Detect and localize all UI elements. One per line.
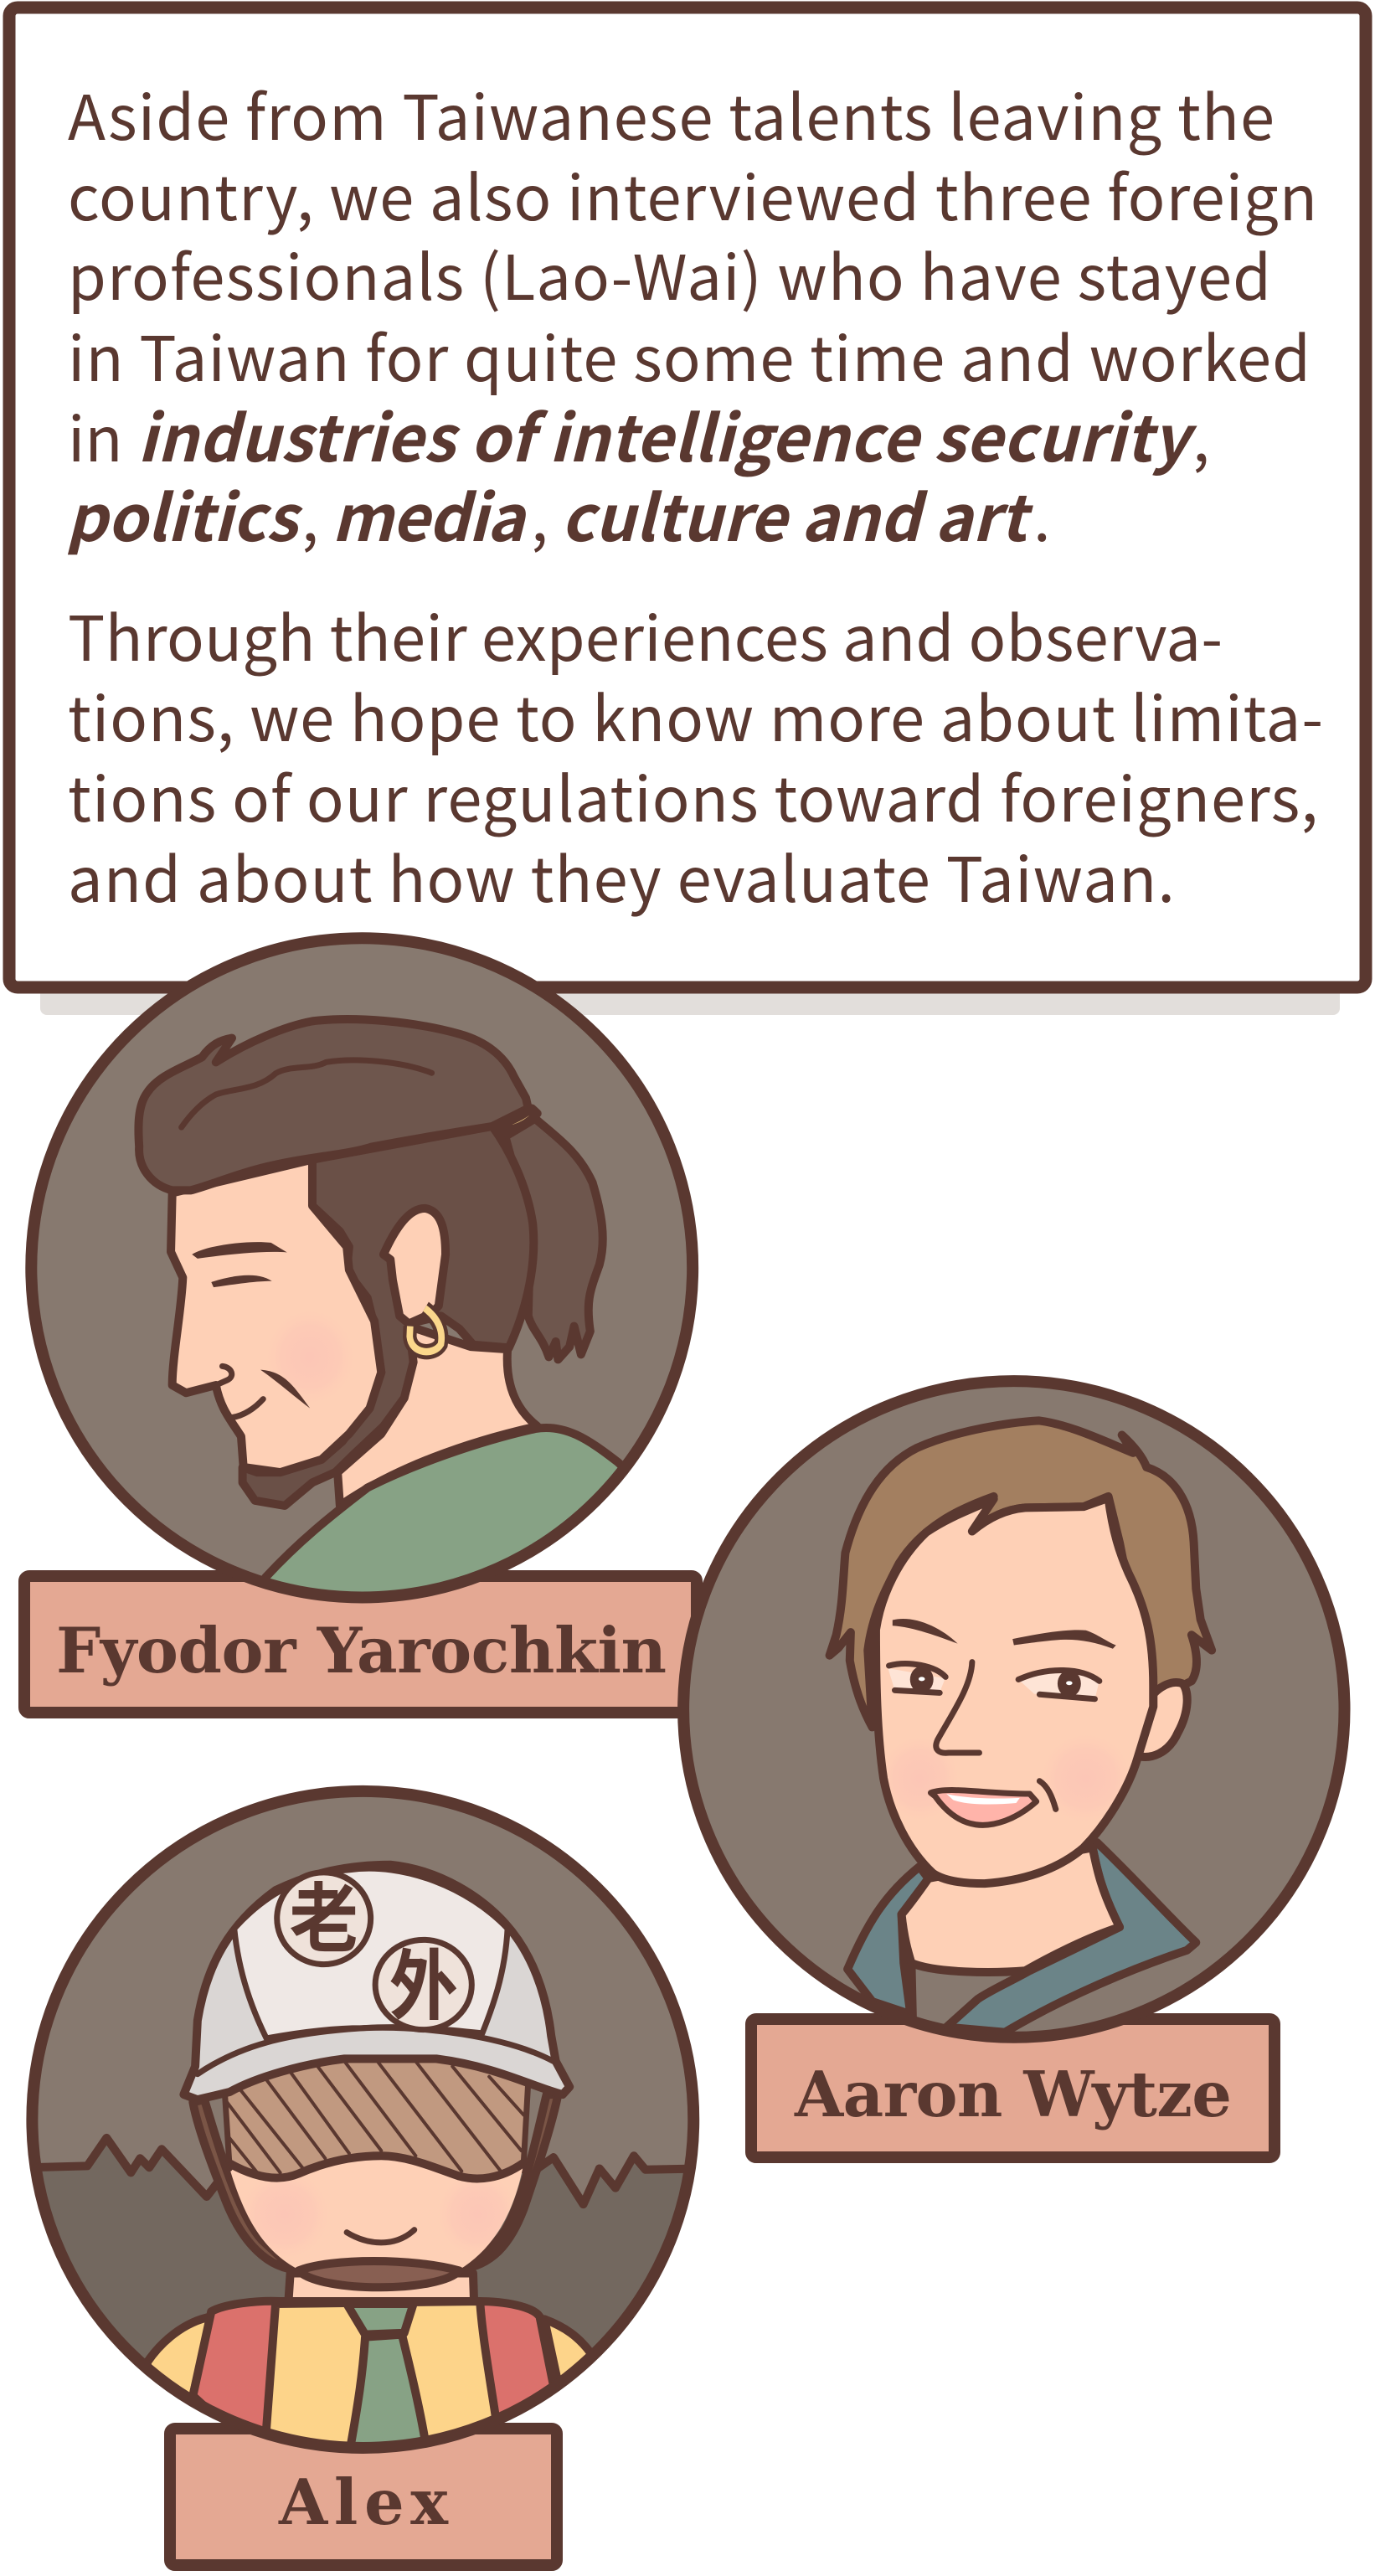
helmet bbox=[183, 1858, 569, 2099]
intro paragraph two: tions of our regulations toward foreigners, bbox=[68, 750, 1318, 840]
intro paragraph one: country, we also interviewed three foreign bbox=[68, 149, 1317, 239]
name label: Fyodor Yarochkin: Fyodor Yarochkin bbox=[56, 1614, 667, 1687]
intro paragraph one: culture and art bbox=[561, 467, 1033, 559]
intro paragraph one: , bbox=[1192, 390, 1210, 480]
intro paragraph one: . bbox=[1033, 470, 1051, 559]
name label: Fyodor Yarochkin bbox=[24, 1576, 697, 1713]
intro paragraph one: in Taiwan for quite some time and worked bbox=[68, 310, 1311, 399]
intro paragraph one: , bbox=[301, 470, 319, 559]
intro paragraph one: industries of intelligence security bbox=[137, 388, 1197, 480]
name label: Alex: Alex bbox=[278, 2465, 449, 2539]
intro paragraph one: in bbox=[68, 390, 122, 480]
name label: Alex bbox=[170, 2429, 557, 2565]
intro paragraph two: tions, we hope to know more about limita- bbox=[68, 670, 1323, 760]
intro paragraph one: media bbox=[332, 467, 528, 559]
intro text panel bbox=[9, 8, 1366, 1015]
portrait: Alex bbox=[28, 1791, 703, 2455]
intro paragraph one: , bbox=[531, 470, 548, 559]
intro paragraph one: politics bbox=[66, 467, 303, 559]
intro paragraph two: Through their experiences and observa- bbox=[68, 590, 1223, 679]
intro paragraph one: Aside from Taiwanese talents leaving the bbox=[68, 69, 1275, 158]
intro paragraph two: and about how they evaluate Taiwan. bbox=[68, 831, 1175, 920]
badge: 老: 老 bbox=[290, 1858, 358, 1970]
badge: 外: 外 bbox=[389, 1924, 458, 2036]
name label: Aaron Wytze bbox=[751, 2019, 1275, 2157]
portrait: Fyodor Yarochkin bbox=[31, 938, 693, 1608]
name label: Aaron Wytze: Aaron Wytze bbox=[794, 2058, 1232, 2131]
intro paragraph one: professionals (Lao-Wai) who have stayed bbox=[68, 229, 1271, 318]
portrait: Aaron Wytze bbox=[683, 1381, 1345, 2038]
